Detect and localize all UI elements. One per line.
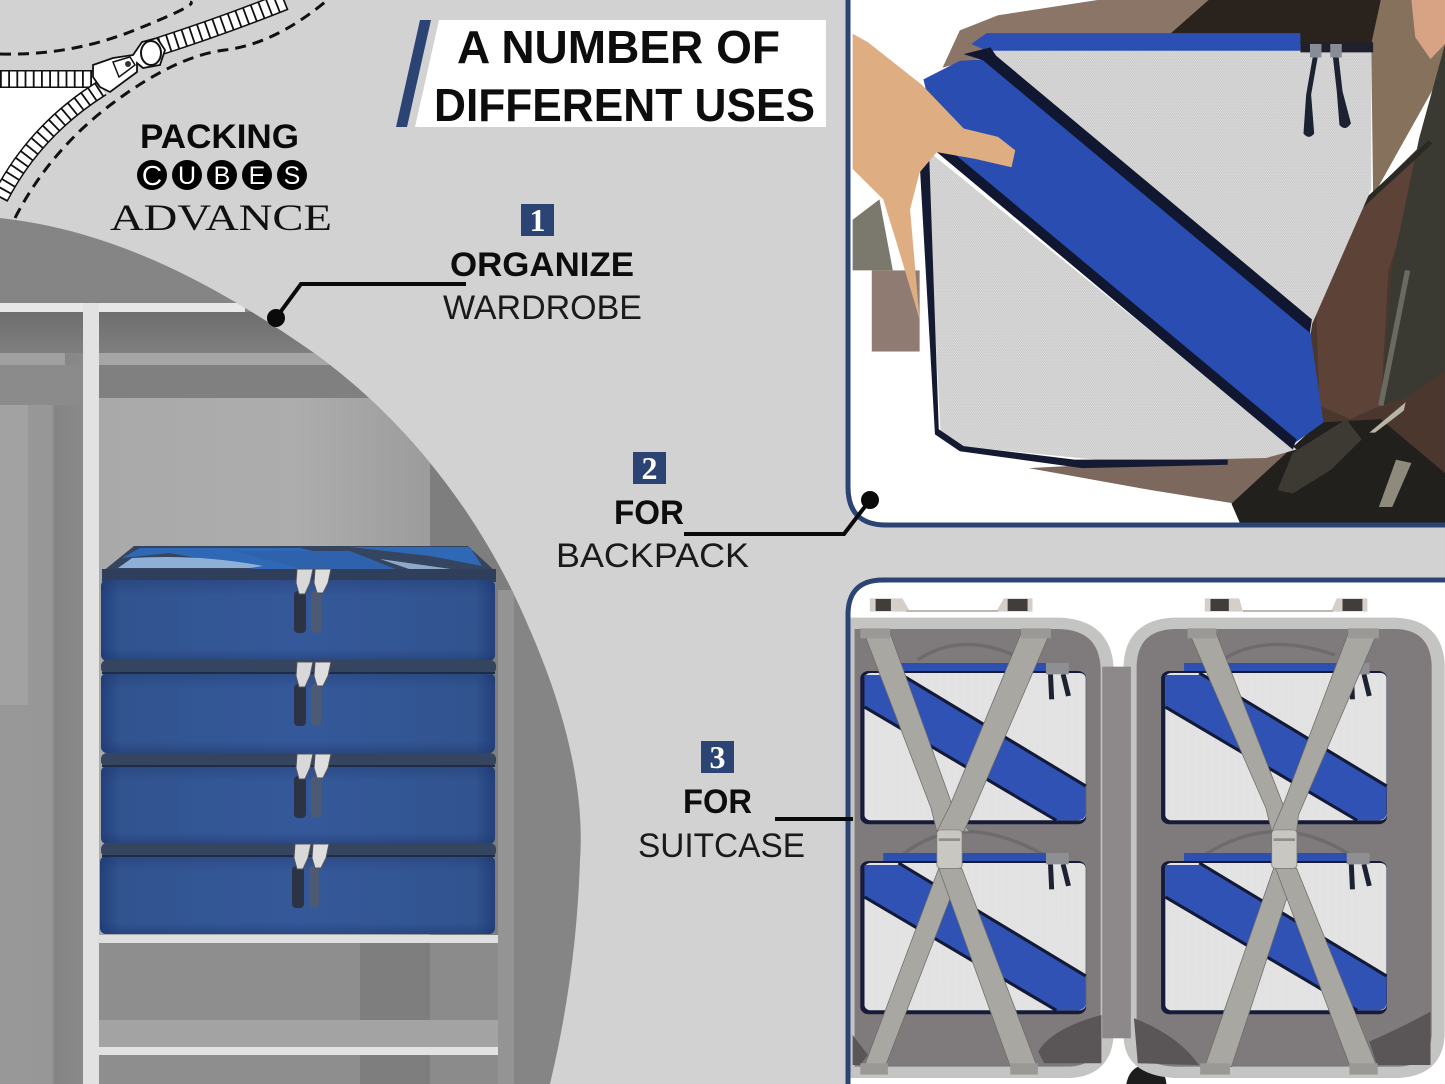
illustration: zipper xyxy=(0,1,325,218)
label 3: SUITCASE xyxy=(638,827,805,865)
logo word: packing: PACKING xyxy=(140,118,299,156)
label 2: FOR xyxy=(614,494,684,532)
badge 1 xyxy=(521,202,554,238)
right crossing straps xyxy=(1188,628,1379,1075)
logo word: cubes: C xyxy=(142,160,162,191)
connector 2 xyxy=(684,491,879,534)
cube top right xyxy=(1161,663,1387,824)
cube 3 xyxy=(101,753,496,844)
label 1 xyxy=(443,246,642,327)
cube stack xyxy=(100,546,496,934)
label 1: ORGANIZE xyxy=(450,246,634,284)
right suitcase shell xyxy=(1130,623,1438,1072)
logo word: cubes: U xyxy=(178,162,196,190)
badge 2 xyxy=(633,450,666,486)
photo: wardrobe with stacked cubes xyxy=(0,218,581,1084)
packing cube xyxy=(920,33,1371,468)
cube 2 xyxy=(101,660,496,753)
cube bottom right xyxy=(1161,853,1387,1014)
title: DIFFERENT USES xyxy=(434,79,815,131)
callout 3: for suitcase xyxy=(638,739,853,865)
connector 3 xyxy=(775,817,853,821)
logo word: cubes: E xyxy=(249,162,265,190)
cube 4 xyxy=(100,843,496,934)
packing cubes in suitcase xyxy=(860,663,1387,1014)
badge 1: 1 xyxy=(530,202,546,238)
label 3: FOR xyxy=(683,783,752,821)
cube 1 xyxy=(101,569,495,661)
label 2 xyxy=(556,494,749,575)
callout 1: organize wardrobe xyxy=(267,202,642,327)
cube top left xyxy=(860,663,1086,824)
badge 3 xyxy=(701,739,734,775)
fingertip xyxy=(1411,0,1445,59)
panel: suitcase photo xyxy=(848,580,1445,1084)
logo word: cubes: B xyxy=(214,162,230,190)
zipper pulls xyxy=(1300,42,1373,137)
label 2: BACKPACK xyxy=(556,537,749,575)
hand xyxy=(853,34,1015,319)
logo word: cubes xyxy=(137,160,307,191)
panel: backpack photo xyxy=(848,0,1445,530)
left crossing straps xyxy=(860,628,1051,1075)
callout 2: for backpack xyxy=(556,450,879,575)
logo word: advance: ADVANCE xyxy=(110,198,332,239)
connector 1 xyxy=(267,284,466,327)
bottom lining folds xyxy=(853,1012,1431,1065)
suitcase handles xyxy=(870,598,1367,612)
wheel xyxy=(1126,1065,1166,1084)
backpack body xyxy=(853,0,1445,530)
center hinge xyxy=(1102,667,1131,1038)
title xyxy=(396,20,826,131)
cube lid xyxy=(102,546,496,582)
cube bottom left xyxy=(860,853,1086,1014)
logo: packing cubes advance xyxy=(110,118,332,239)
badge 2: 2 xyxy=(642,450,658,486)
badge 3: 3 xyxy=(710,739,726,775)
label 3 xyxy=(638,783,805,865)
inner pocket arcs xyxy=(902,644,1350,855)
label 1: WARDROBE xyxy=(443,289,642,327)
logo word: cubes: S xyxy=(284,162,300,190)
left suitcase shell xyxy=(848,623,1107,1072)
title: A NUMBER OF xyxy=(457,21,780,73)
